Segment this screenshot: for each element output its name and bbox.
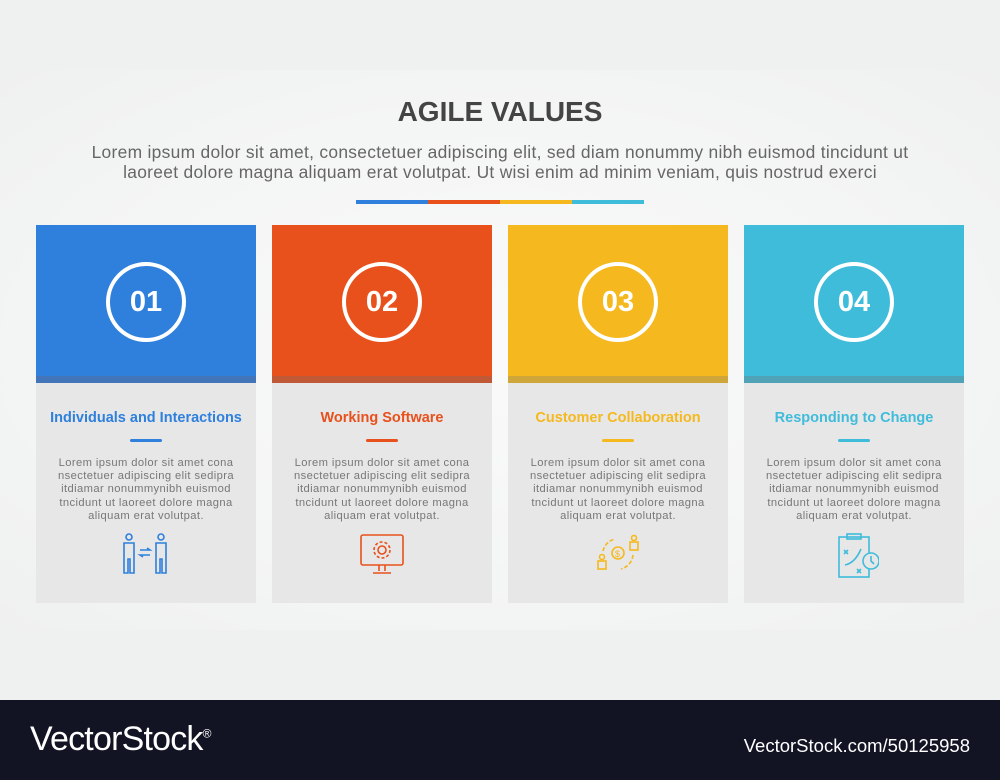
text 01: Lorem ipsum dolor sit amet cona	[59, 457, 233, 469]
number circle 03: 03	[602, 286, 634, 318]
text 04: aliquam erat volutpat.	[796, 510, 912, 522]
text 02: Lorem ipsum dolor sit amet cona	[295, 457, 469, 469]
icon: money exchange: $	[615, 549, 620, 559]
heading 02: Working Software	[320, 410, 444, 426]
number circle 02: 02	[366, 286, 398, 318]
text 03: tncidunt ut laoreet dolore magna	[531, 497, 705, 509]
footer watermark bar	[0, 700, 1000, 780]
text 02: nsectetuer adipiscing elit sedipra	[294, 470, 470, 482]
subtitle: laoreet dolore magna aliquam erat volutpat. Ut wisi enim ad minim veniam, quis nostrud exerci	[123, 162, 877, 182]
panel: 04 Responding to Change	[744, 225, 964, 603]
icon: money exchange	[597, 534, 639, 570]
text 03: aliquam erat volutpat.	[560, 510, 676, 522]
logo text: VectorStock®	[30, 720, 211, 758]
panel: 02 Working Software	[272, 225, 492, 603]
icon: people exchange	[123, 533, 167, 574]
text 01	[58, 457, 234, 522]
text 01: aliquam erat volutpat.	[88, 510, 204, 522]
text 04: Lorem ipsum dolor sit amet cona	[767, 457, 941, 469]
icon: monitor gear	[360, 534, 404, 574]
text 03: Lorem ipsum dolor sit amet cona	[531, 457, 705, 469]
number circle 04: 04	[838, 286, 870, 318]
number circle 04	[814, 262, 894, 342]
panel: 01 Individuals and Interactions	[36, 225, 256, 603]
text 01: nsectetuer adipiscing elit sedipra	[58, 470, 234, 482]
text 02: aliquam erat volutpat.	[324, 510, 440, 522]
text 02	[294, 457, 470, 522]
text 03: nsectetuer adipiscing elit sedipra	[530, 470, 706, 482]
heading 03: Customer Collaboration	[535, 410, 701, 426]
subtitle	[92, 142, 908, 182]
url text: VectorStock.com/50125958	[744, 735, 970, 756]
number circle 02	[342, 262, 422, 342]
text 02: tncidunt ut laoreet dolore magna	[295, 497, 469, 509]
number circle 01: 01	[130, 286, 162, 318]
text 01: tncidunt ut laoreet dolore magna	[59, 497, 233, 509]
text 02: itdiamar nonummynibh euismod	[297, 483, 467, 495]
icon: clipboard clock	[838, 533, 879, 578]
text 04: tncidunt ut laoreet dolore magna	[767, 497, 941, 509]
heading 04: Responding to Change	[775, 410, 933, 426]
text 03: itdiamar nonummynibh euismod	[533, 483, 703, 495]
text 01: itdiamar nonummynibh euismod	[61, 483, 231, 495]
text 04	[766, 457, 942, 522]
panel: 03 Customer Collaboration	[508, 225, 728, 603]
heading 01: Individuals and Interactions	[50, 410, 242, 426]
title: AGILE VALUES	[398, 96, 602, 127]
number circle 01	[106, 262, 186, 342]
text 04: nsectetuer adipiscing elit sedipra	[766, 470, 942, 482]
number circle 03	[578, 262, 658, 342]
text 04: itdiamar nonummynibh euismod	[769, 483, 939, 495]
subtitle: Lorem ipsum dolor sit amet, consectetuer adipiscing elit, sed diam nonummy nibh euismod tincidunt ut	[92, 142, 908, 162]
text 03	[530, 457, 706, 522]
color divider bar	[356, 200, 644, 204]
